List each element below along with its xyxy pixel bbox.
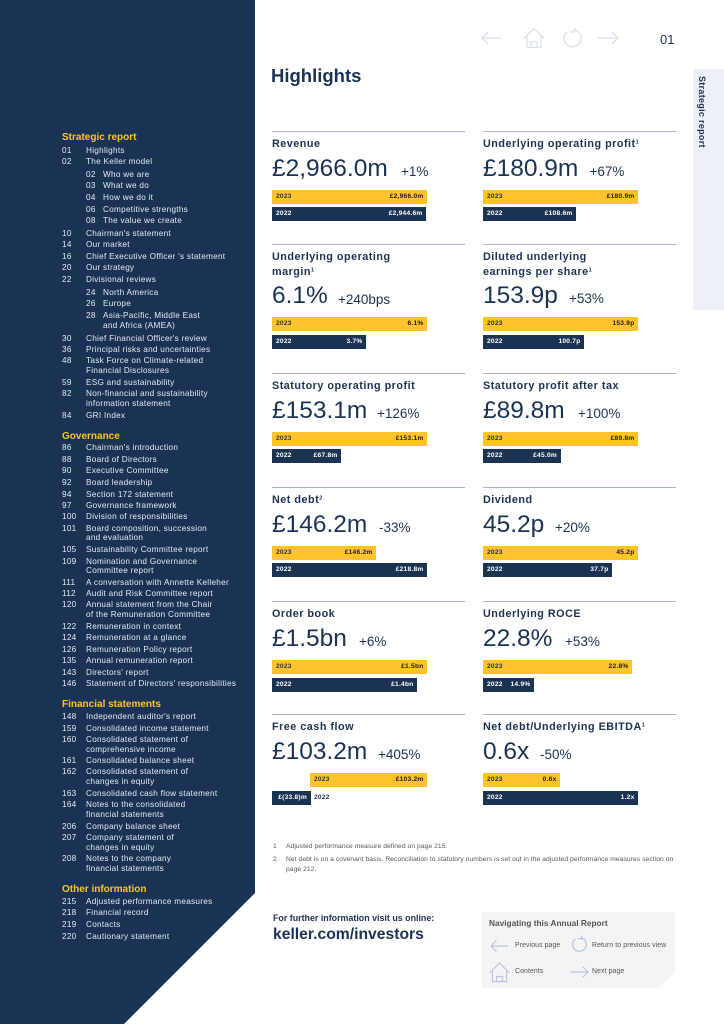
contents section: Strategic report: 16 [62, 252, 72, 261]
contents section: Strategic report: ESG and sustainability [86, 378, 175, 387]
contents section: Other information: 215 [62, 897, 77, 906]
footnotes: Adjusted performance measure defined on page 215. [286, 842, 447, 850]
contents section: Strategic report: 08 [86, 216, 96, 225]
contents section: Strategic report: 14 [62, 240, 72, 249]
contents section: Governance: Chairman's introduction [86, 443, 178, 452]
contents section: Governance: of the Remuneration Committee [86, 610, 210, 619]
panel: Dividend: 2023 [487, 549, 503, 556]
panel: Diluted underlying earnings per share: 2022 [487, 338, 503, 345]
contents section: Governance: Section 172 statement [86, 490, 173, 499]
contents section: Governance: Nomination and Governance [86, 557, 197, 566]
panel: Free cash flow: £103.2m [272, 738, 367, 765]
contents section: Strategic report: North America [103, 288, 159, 297]
online link callout: For further information visit us online: [273, 912, 434, 922]
contents section: Strategic report: 10 [62, 229, 72, 238]
contents section: Strategic report: information statement [86, 399, 171, 408]
panel: Underlying operating margin: 3.7% [346, 338, 362, 345]
contents section: Governance: 92 [62, 478, 72, 487]
panel: Net debt / Underlying EBITDA: 2022 [487, 794, 503, 800]
panel: Underlying operating profit: £180.9m [607, 193, 634, 200]
contents section: Strategic report: 22 [62, 275, 72, 284]
contents section: Other information: Adjusted performance measures [86, 897, 212, 906]
panel: Statutory profit after tax: 2023 [487, 435, 503, 442]
contents section: Financial statements: 164 [62, 800, 77, 809]
panel: Underlying operating profit: £108.6m [545, 210, 572, 217]
contents section: Governance: Board of Directors [86, 455, 157, 464]
contents section: Strategic report: Competitive strengths [103, 205, 188, 214]
contents section: Governance: Audit and Risk Committee report [86, 589, 213, 598]
contents section: Other information: Other information [62, 884, 146, 895]
contents section: Governance: Sustainability Committee report [86, 545, 208, 554]
panel: Underlying operating margin: margin1 [272, 266, 314, 278]
contents section: Governance: Division of responsibilities [86, 512, 188, 521]
panel: Revenue: 2022 [276, 210, 292, 217]
panel: Revenue: £2,966.0m [390, 193, 424, 200]
panel: Free cash flow: £(33.8)m [278, 794, 307, 800]
online link callout: keller.com/investors [273, 926, 424, 943]
panel: Statutory operating profit: Statutory operating profit [272, 380, 415, 392]
panel: Revenue: £2,944.6m [389, 210, 422, 217]
contents section: Strategic report: 28 [86, 311, 96, 320]
panel: Underlying ROCE: 22.8% [483, 625, 552, 652]
panel: navigation legend: Return to previous view [592, 942, 666, 948]
footnotes: Net debt is on a covenant basis. Reconciliation to statutory numbers is set out in the adjusted performance measures section on [286, 856, 673, 863]
contents section: Financial statements: comprehensive income [86, 745, 176, 754]
panel: Underlying ROCE: +53% [565, 634, 600, 648]
panel: navigation legend: Next page [592, 968, 624, 975]
contents section: Other information [62, 884, 212, 941]
contents section: Financial statements: Financial statements [62, 699, 161, 710]
panel: Statutory profit after tax: 2022 [487, 452, 503, 459]
contents section: Other information: 219 [62, 920, 77, 929]
contents section: Strategic report: Chief Financial Officer's review [86, 334, 207, 343]
contents section: Strategic report: 82 [62, 389, 72, 398]
panel: Statutory profit after tax: £89.8m [611, 435, 634, 442]
contents section: Governance: 143 [62, 668, 77, 677]
contents section: Strategic report: The Keller model [86, 157, 152, 166]
contents section: Strategic report: 06 [86, 205, 96, 214]
panel: Diluted underlying earnings per share: 153.9p [612, 320, 634, 327]
contents section: Financial statements: 162 [62, 767, 77, 776]
contents section: Governance: 124 [62, 633, 77, 642]
contents section: Financial statements: Consolidated statement of [86, 735, 188, 744]
contents section: Strategic report: 02 [62, 157, 72, 166]
panel: Statutory operating profit [272, 373, 465, 464]
contents section: Strategic report: GRI Index [86, 411, 125, 420]
panel: Statutory operating profit: £67.8m [314, 452, 338, 459]
contents section: Strategic report: Non-financial and sustainability [86, 389, 208, 398]
contents section: Governance [62, 431, 236, 688]
contents section: Financial statements: Notes to the company [86, 854, 171, 863]
panel: Net debt / Underlying EBITDA: -50% [540, 746, 572, 762]
panel: Statutory profit after tax: Statutory profit after tax [483, 380, 619, 392]
panel: Revenue: 2023 [276, 193, 292, 200]
panel: Underlying ROCE: 14.9% [511, 680, 530, 688]
side tab: Strategic report: Strategic report [697, 76, 707, 148]
panel: Underlying operating margin: 6.1% [407, 320, 424, 327]
panel: Underlying operating margin: +240bps [338, 292, 390, 306]
contents section: Governance: 105 [62, 545, 77, 554]
contents section: Other information: 220 [62, 932, 77, 941]
contents section: Financial statements: Consolidated balance sheet [86, 756, 194, 765]
contents section: Financial statements: Consolidated income statement [86, 724, 209, 733]
side tab: Strategic report [693, 69, 724, 310]
contents section: Financial statements: 160 [62, 735, 77, 744]
contents section: Governance: Annual statement from the Chair [86, 600, 213, 609]
contents section: Financial statements: 206 [62, 822, 77, 831]
contents section: Financial statements: 148 [62, 712, 77, 721]
contents section: Financial statements: 159 [62, 724, 77, 733]
panel: Free cash flow: £103.2m [396, 776, 424, 783]
contents section: Other information: Cautionary statement [86, 932, 169, 941]
contents section: Governance: 100 [62, 512, 77, 521]
footnotes: page 212. [286, 866, 316, 873]
contents section: Strategic report: What we do [103, 181, 149, 190]
contents section: Strategic report: 02 [86, 170, 96, 179]
title: Highlights [271, 65, 361, 86]
panel: navigation legend: Navigating this Annual Report [489, 918, 608, 928]
contents section: Strategic report: Chief Executive Officer 's statement [86, 252, 225, 261]
contents section: Financial statements: Consolidated cash flow statement [86, 789, 217, 798]
panel: Net debt: £218.8m [396, 566, 424, 573]
panel: Free cash flow [272, 714, 465, 805]
contents section: Strategic report: Asia-Pacific, Middle East [103, 311, 200, 320]
panel: Underlying operating margin: 6.1% [272, 282, 328, 309]
panel: Underlying operating margin: 2022 [276, 338, 292, 345]
panel: Revenue: +1% [401, 164, 428, 178]
panel: Dividend: Dividend [483, 494, 533, 506]
panel: Net debt [272, 487, 465, 578]
contents section: Governance: Statement of Directors' responsibilities [86, 679, 236, 688]
contents section: Other information: Contacts [86, 920, 121, 929]
contents section: Governance: and evaluation [86, 533, 143, 542]
panel: Net debt / Underlying EBITDA: 0.6x [483, 738, 529, 765]
panel: Statutory profit after tax: £45.0m [533, 452, 557, 459]
contents section: Governance: 90 [62, 466, 72, 475]
panel: Order book [272, 601, 465, 692]
contents section: Strategic report: 26 [86, 299, 96, 308]
contents section: Financial statements: 208 [62, 854, 77, 863]
footnotes: 2 [273, 856, 277, 863]
contents section: Strategic report: 59 [62, 378, 72, 387]
panel: Diluted underlying earnings per share: 2023 [487, 320, 503, 327]
panel: Statutory operating profit: 2022 [276, 452, 292, 459]
panel: Statutory profit after tax: +100% [578, 406, 620, 420]
panel: Underlying ROCE [483, 601, 676, 692]
online link callout [273, 912, 434, 943]
panel: Diluted underlying earnings per share: Diluted underlying [483, 251, 587, 263]
panel: Free cash flow: Free cash flow [272, 721, 354, 733]
panel: Net debt: 2022 [276, 566, 292, 573]
panel: Revenue: Revenue [272, 138, 321, 150]
contents section: Governance: Directors' report [86, 668, 149, 677]
panel: Underlying operating margin [272, 244, 465, 349]
top navigation icons [481, 28, 619, 48]
contents section: Financial statements: Notes to the consolidated [86, 800, 185, 809]
panel: Statutory operating profit: 2023 [276, 435, 292, 442]
panel: Net debt: Net debt2 [272, 494, 322, 506]
contents section: Governance: 122 [62, 622, 77, 631]
contents section: Strategic report: Task Force on Climate-related [86, 356, 203, 365]
contents section: Strategic report: The value we create [103, 216, 182, 225]
contents section: Financial statements: 163 [62, 789, 77, 798]
panel: Dividend: 2022 [487, 566, 503, 573]
panel: Diluted underlying earnings per share: +53% [569, 291, 604, 306]
contents section: Strategic report: 24 [86, 288, 96, 297]
panel: Dividend: 37.7p [590, 566, 608, 573]
contents section: Governance: 94 [62, 490, 72, 499]
panel: Underlying operating profit: 2022 [487, 210, 503, 217]
panel: Statutory operating profit: +126% [377, 406, 419, 420]
contents section: Governance: Committee report [86, 566, 154, 575]
contents section: Governance: 101 [62, 524, 77, 533]
panel: Underlying operating margin: Underlying operating [272, 251, 391, 263]
contents section: Governance: 112 [62, 589, 76, 598]
contents section: Strategic report: Our market [86, 240, 130, 249]
contents section: Strategic report: 84 [62, 411, 72, 420]
contents section: Governance: 88 [62, 455, 72, 464]
panel: Net debt / Underlying EBITDA [483, 714, 676, 805]
contents section: Financial statements: 207 [62, 833, 77, 842]
contents section: Financial statements: changes in equity [86, 843, 154, 852]
contents section: Other information: Financial record [86, 908, 149, 917]
contents section: Strategic report: and Africa (AMEA) [103, 321, 175, 330]
contents section: Strategic report [62, 132, 225, 420]
panel: Statutory profit after tax [483, 373, 676, 464]
panel: Net debt / Underlying EBITDA: Net debt/Underlying EBITDA1 [483, 721, 645, 733]
panel: Dividend: 45.2p [483, 511, 544, 538]
contents section: Financial statements [62, 699, 218, 873]
panel: Dividend [483, 487, 676, 578]
panel: Underlying ROCE: 2022 [487, 680, 503, 688]
panel: Dividend: 45.2p [616, 549, 634, 556]
contents section: Governance: Remuneration in context [86, 622, 181, 631]
contents section: Governance: A conversation with Annette Kelleher [86, 578, 229, 587]
contents section: Financial statements: Company statement of [86, 833, 174, 842]
contents section: Governance: Board leadership [86, 478, 152, 487]
panel: navigation legend: Contents [515, 968, 543, 974]
panel: Order book: +6% [359, 634, 386, 648]
panel: Underlying ROCE: 22.8% [609, 663, 628, 670]
panel: Diluted underlying earnings per share: earnings per share1 [483, 266, 592, 278]
contents section: Governance: Governance [62, 431, 120, 442]
contents section: Strategic report: Europe [103, 299, 131, 308]
contents section: Strategic report: Divisional reviews [86, 275, 156, 284]
panel: Revenue [272, 131, 465, 222]
contents section: Governance: 109 [62, 557, 77, 566]
panel: Underlying operating margin: 2023 [276, 320, 292, 327]
contents section: Governance: Remuneration Policy report [86, 645, 192, 654]
panel: Net debt / Underlying EBITDA: 2023 [487, 776, 503, 783]
panel: navigation legend: Previous page [515, 942, 560, 948]
contents section: Strategic report: Financial Disclosures [86, 366, 169, 375]
contents section: Strategic report: Principal risks and uncertainties [86, 345, 210, 354]
contents section: Strategic report: 01 [62, 146, 72, 154]
contents section: Governance: 97 [62, 501, 72, 510]
sidebar background [0, 0, 255, 1024]
contents section: Other information: 218 [62, 908, 77, 917]
contents section: Governance: Board composition, succession [86, 524, 207, 533]
contents section: Financial statements: changes in equity [86, 777, 154, 786]
panel: Order book: Order book [272, 608, 335, 620]
contents section: Strategic report: How we do it [103, 193, 153, 202]
panel: Net debt: -33% [379, 520, 411, 534]
panel: Statutory operating profit: £153.1m [396, 435, 424, 442]
contents section: Governance: Annual remuneration report [86, 656, 193, 665]
contents section: Financial statements: financial statements [86, 864, 164, 873]
contents section: Financial statements: Company balance sheet [86, 822, 180, 831]
contents section: Strategic report: Highlights [86, 146, 125, 154]
panel: Diluted underlying earnings per share [483, 244, 676, 349]
contents section: Strategic report: 03 [86, 181, 96, 190]
contents section: Governance: Executive Committee [86, 466, 169, 475]
contents section: Financial statements: 161 [62, 756, 77, 765]
contents section: Strategic report: 48 [62, 356, 72, 365]
contents section: Governance: 146 [62, 679, 77, 688]
panel: Order book: £1.5bn [401, 663, 424, 670]
panel: Underlying ROCE: 2023 [487, 663, 503, 670]
panel: Underlying operating profit: Underlying operating profit1 [483, 138, 639, 150]
contents section: Strategic report: Strategic report [62, 132, 136, 143]
contents section: Financial statements: financial statements [86, 810, 164, 819]
panel: Free cash flow: +405% [378, 746, 420, 762]
contents section: Strategic report: Chairman's statement [86, 229, 171, 238]
panel: Diluted underlying earnings per share: 100.7p [558, 338, 580, 345]
panel: Dividend: +20% [555, 520, 590, 534]
panel: Free cash flow: 2023 [314, 776, 330, 783]
panel: Revenue: £2,966.0m [272, 155, 388, 182]
panel: Underlying operating profit [483, 131, 676, 222]
contents section: Governance: 135 [62, 656, 77, 665]
panel: Net debt / Underlying EBITDA: 1.2x [621, 794, 634, 800]
panel: Underlying operating profit: 2023 [487, 193, 503, 200]
panel: Net debt / Underlying EBITDA: 0.6x [543, 776, 556, 783]
panel: Net debt: 2023 [276, 549, 292, 556]
panel: Underlying operating profit: £180.9m [483, 155, 578, 182]
panel: Order book: £1.5bn [272, 625, 347, 652]
contents section: Strategic report: 04 [86, 193, 96, 202]
contents section: Financial statements: Independent auditor's report [86, 712, 196, 721]
panel: Diluted underlying earnings per share: 153.9p [483, 282, 558, 309]
panel: Net debt: £146.2m [345, 549, 372, 556]
contents section: Strategic report: Our strategy [86, 263, 134, 272]
footnotes: 1 [273, 842, 277, 850]
panel: Statutory operating profit: £153.1m [272, 397, 367, 424]
panel: navigation legend [482, 912, 675, 988]
contents section: Governance: Remuneration at a glance [86, 633, 186, 642]
panel: Underlying operating profit: +67% [590, 164, 624, 178]
panel: Free cash flow: 2022 [314, 794, 330, 800]
panel: Net debt: £146.2m [272, 511, 367, 538]
panel: Underlying ROCE: Underlying ROCE [483, 608, 581, 620]
panel: Order book: £1.4bn [391, 680, 414, 688]
panel: Order book: 2023 [276, 663, 292, 670]
footnotes [273, 842, 673, 873]
contents section: Governance: 111 [62, 578, 75, 587]
contents section: Strategic report: Who we are [103, 170, 149, 179]
panel: Order book: 2022 [276, 680, 292, 688]
contents section: Governance: 120 [62, 600, 77, 609]
contents section: Governance: 126 [62, 645, 77, 654]
contents section: Strategic report: 36 [62, 345, 72, 354]
contents section: Strategic report: 20 [62, 263, 72, 272]
contents section: Governance: 86 [62, 443, 72, 452]
contents section: Financial statements: Consolidated statement of [86, 767, 188, 776]
page number: 01 [660, 32, 674, 47]
contents section: Governance: Governance framework [86, 501, 177, 510]
contents section: Strategic report: 30 [62, 334, 72, 343]
panel: Statutory profit after tax: £89.8m [483, 397, 565, 424]
